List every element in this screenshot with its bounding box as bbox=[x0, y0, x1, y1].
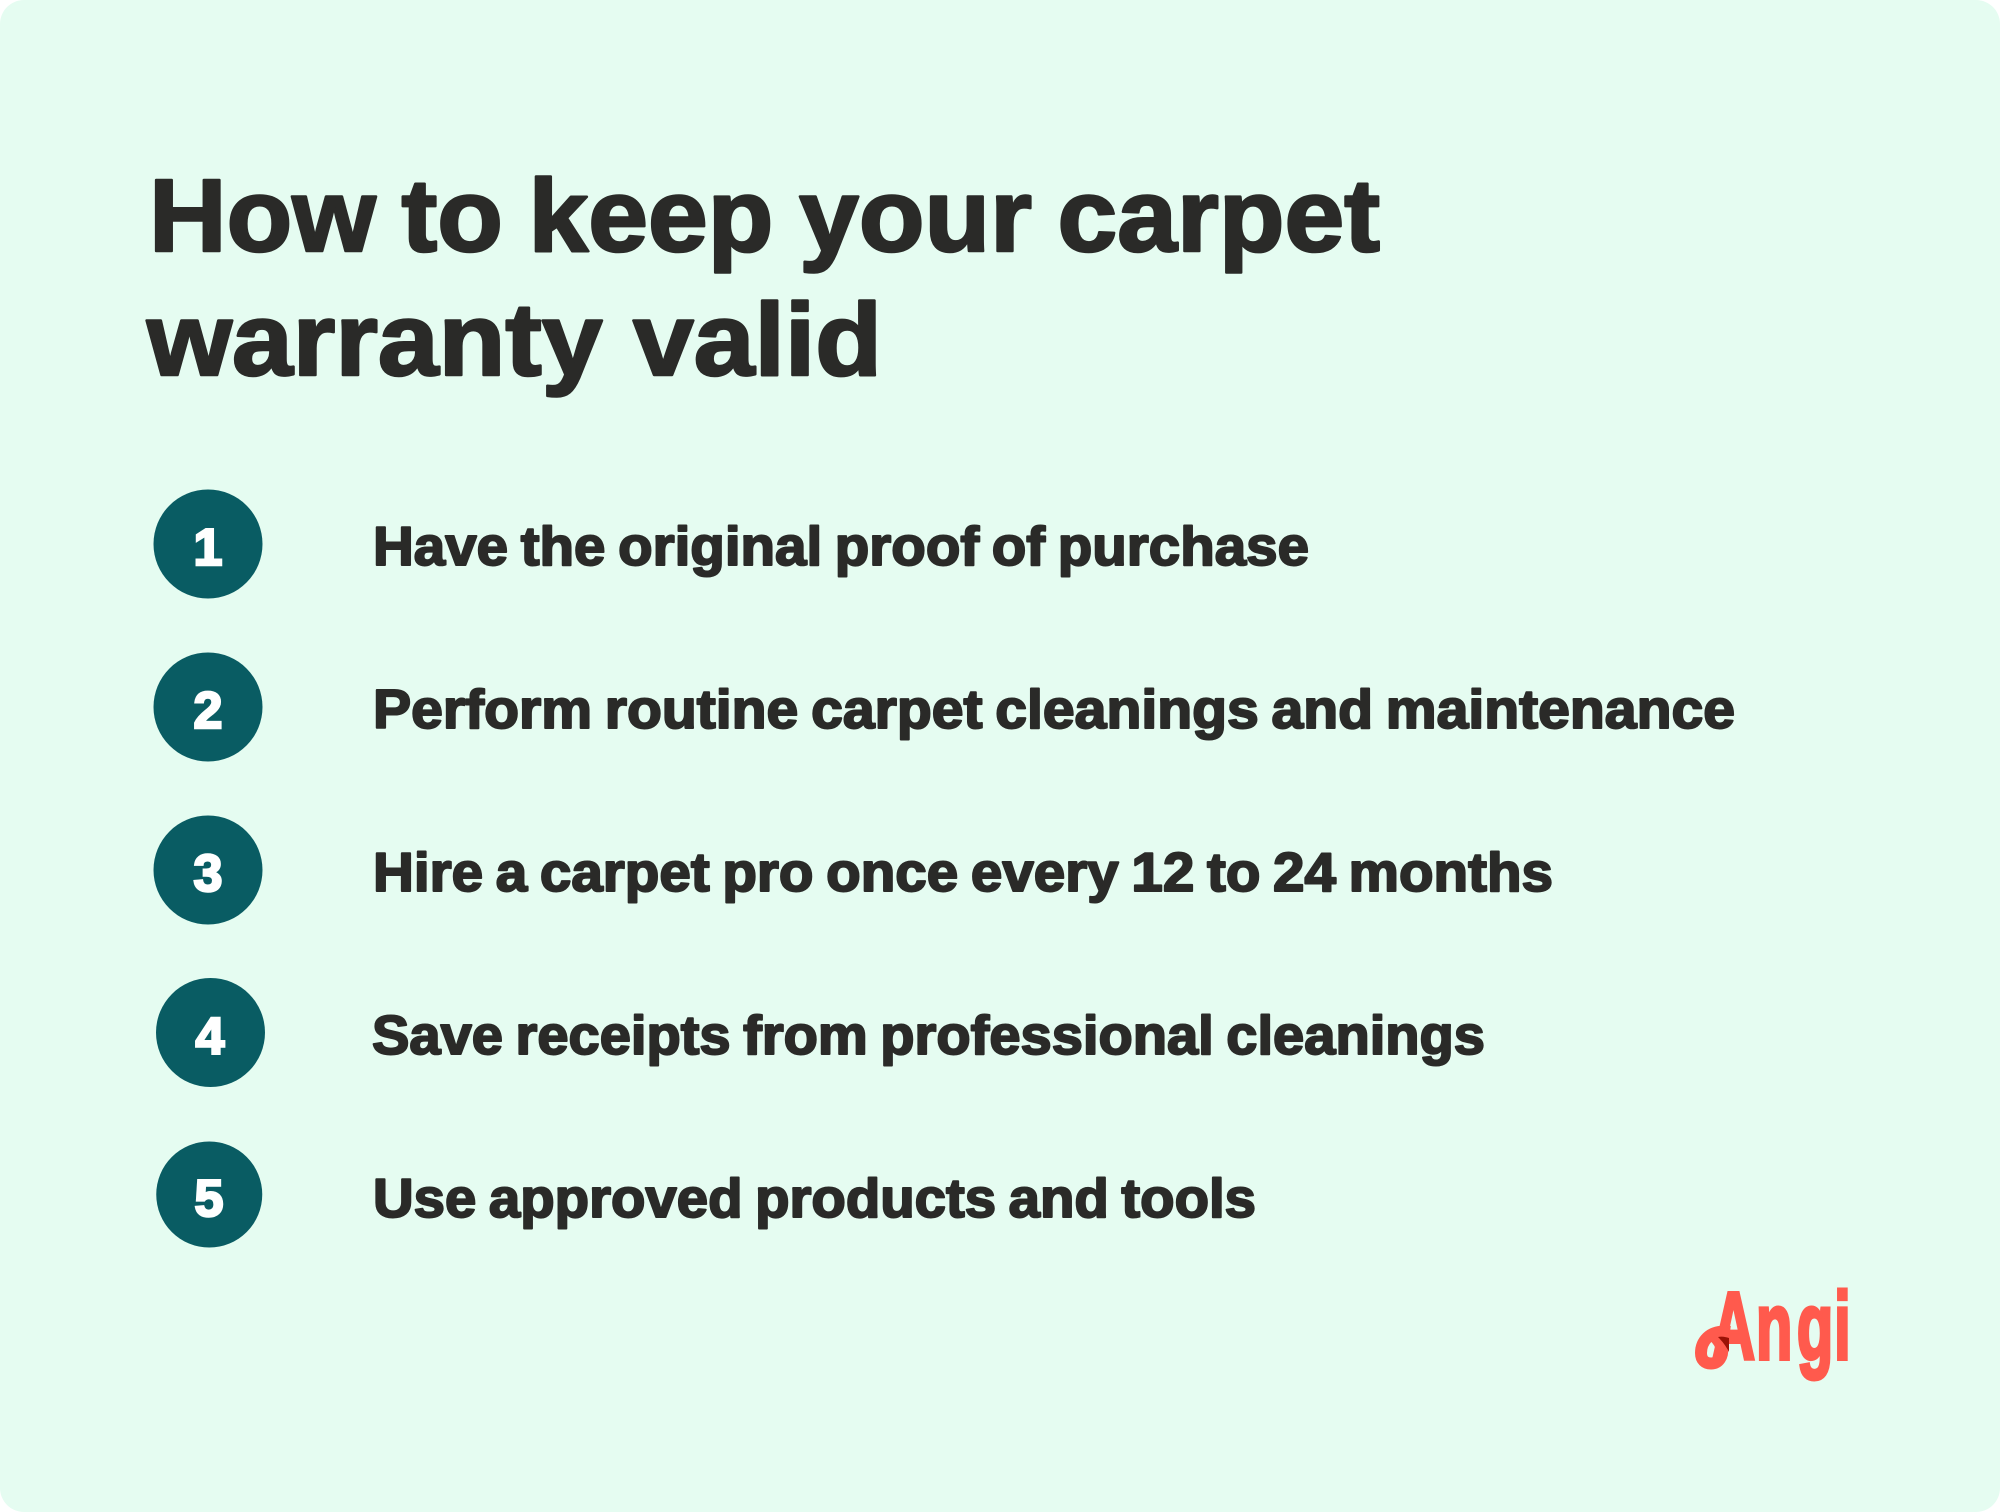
number badge 5: 5 bbox=[195, 1170, 223, 1228]
item 3 text: Hire a carpet pro once every 12 to 24 months bbox=[373, 841, 1553, 903]
number badge 1: 1 bbox=[194, 519, 222, 577]
item 4 text: Save receipts from professional cleanings bbox=[372, 1004, 1485, 1066]
number badge 1 bbox=[154, 490, 262, 598]
list item 4 bbox=[156, 978, 1485, 1087]
number badge 4 bbox=[156, 978, 265, 1087]
title: warranty valid bbox=[146, 282, 882, 397]
logo overlap accent bbox=[1718, 1337, 1729, 1352]
number badge 2: 2 bbox=[194, 682, 222, 740]
list item 5 bbox=[156, 1142, 1256, 1248]
list item 3 bbox=[154, 816, 1553, 924]
number badge 3 bbox=[154, 816, 262, 924]
item 5 text: Use approved products and tools bbox=[373, 1167, 1256, 1229]
number badge 5 bbox=[156, 1142, 262, 1248]
title: How to keep your carpet bbox=[149, 158, 1380, 273]
number badge 4: 4 bbox=[196, 1008, 225, 1066]
logo loop swash bbox=[1701, 1332, 1730, 1364]
list item 1 bbox=[154, 490, 1309, 598]
item 1 text: Have the original proof of purchase bbox=[373, 515, 1309, 577]
item 2 text: Perform routine carpet cleanings and maintenance bbox=[373, 678, 1735, 740]
number badge 3: 3 bbox=[194, 845, 222, 903]
title bbox=[146, 158, 1380, 397]
list item 2 bbox=[154, 652, 1735, 762]
Angi logo bbox=[1701, 1272, 1851, 1379]
logo wordmark: Angi bbox=[1712, 1272, 1851, 1379]
number badge 2 bbox=[154, 652, 262, 762]
